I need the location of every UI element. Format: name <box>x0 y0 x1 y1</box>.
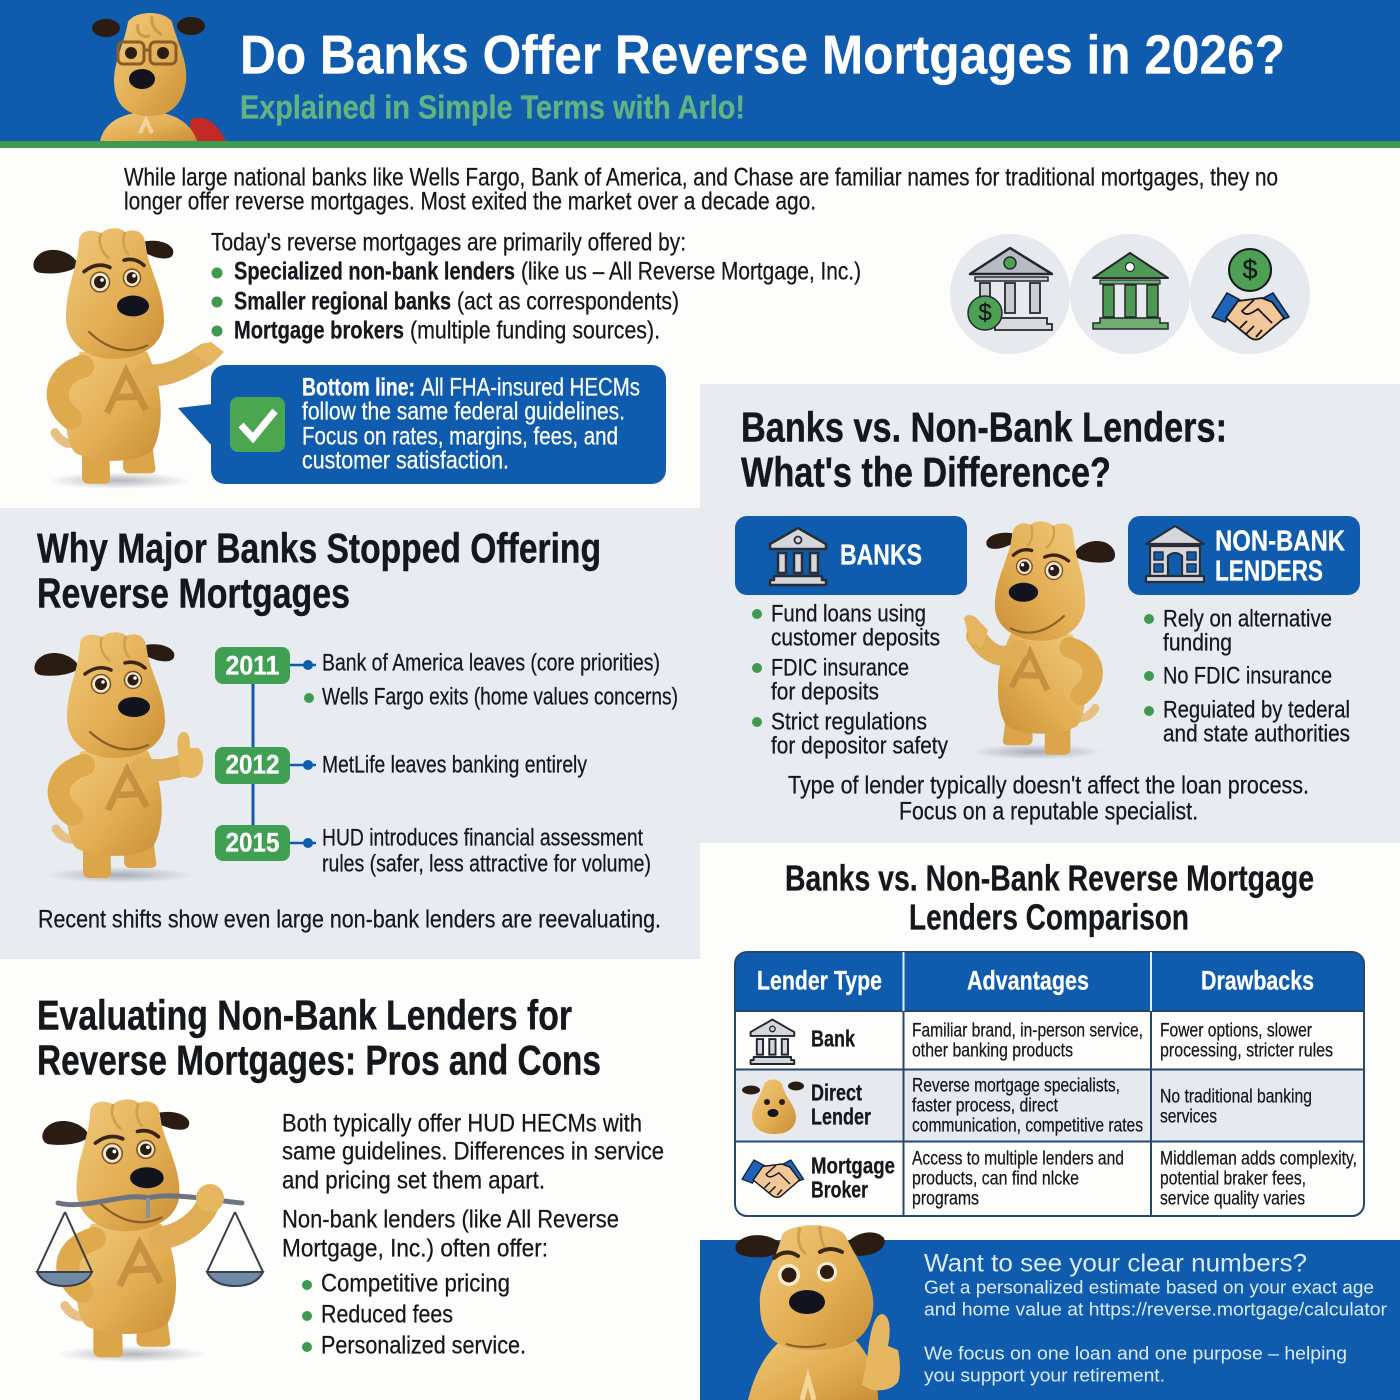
text: footer message: We focus on one loan and one purpose – helping <box>924 1342 1347 1364</box>
row: direct lender: Lender <box>811 1104 871 1130</box>
row: direct lender: No traditional banking <box>1160 1086 1312 1108</box>
list: non-bank traits <box>1144 606 1350 748</box>
icon: green bank <box>1093 253 1168 329</box>
row: bank: processing, stricter rules <box>1160 1040 1333 1062</box>
list: banks traits <box>752 600 948 760</box>
row: mortgage broker: programs <box>912 1188 979 1210</box>
icon: mascot head <box>742 1080 804 1134</box>
subtitle: Explained in Simple Terms with Arlo! <box>240 88 745 126</box>
timeline entry: 2011: 2011 <box>226 650 280 680</box>
row: direct lender: communication, competitive rates <box>912 1114 1143 1136</box>
callout: bottom line <box>178 365 666 484</box>
table header: Lender Type <box>757 966 882 996</box>
heading: why major banks stopped: Reverse Mortgages <box>37 570 350 616</box>
icon: header mascot with glasses <box>92 13 226 141</box>
row: mortgage broker <box>742 1148 1357 1210</box>
text: footer message: you support your retirement. <box>924 1364 1165 1386</box>
list: banks traits: Strict regulations <box>771 708 927 736</box>
list: who offers reverse mortgages <box>211 228 861 344</box>
table header: Advantages <box>967 966 1089 996</box>
callout: bottom line: customer satisfaction. <box>302 446 509 474</box>
card: non-bank lenders header: LENDERS <box>1215 556 1323 588</box>
list: who offers reverse mortgages: (act as correspondents) <box>457 288 679 316</box>
icon: lender building <box>1146 526 1204 582</box>
row: bank: Familiar brand, in-person service, <box>912 1020 1143 1042</box>
title: Do Banks Offer Reverse Mortgages in 2026? <box>240 24 1285 86</box>
timeline entry: 2012 <box>215 747 587 784</box>
list: banks traits: customer deposits <box>771 624 940 652</box>
timeline <box>215 647 678 878</box>
row: mortgage broker: Mortgage <box>811 1152 895 1178</box>
heading: evaluating non-bank lenders: Evaluating Non-Bank Lenders for <box>37 992 572 1038</box>
icon: mascot presenting <box>33 228 224 489</box>
list: who offers reverse mortgages: Smaller regional banks <box>234 288 451 316</box>
heading: evaluating non-bank lenders: Reverse Mortgages: Pros and Cons <box>37 1036 601 1084</box>
row: bank: other banking products <box>912 1040 1073 1062</box>
list: who offers reverse mortgages: Specialized non-bank lenders <box>234 258 515 286</box>
icon: green check <box>230 397 285 452</box>
intro paragraph <box>124 164 1278 216</box>
callout: bottom line: Bottom line: <box>302 374 415 402</box>
timeline entry: 2012: MetLife leaves banking entirely <box>322 752 587 778</box>
row: direct lender <box>742 1074 1312 1136</box>
callout: bottom line: follow the same federal guidelines. <box>302 398 625 426</box>
row: bank: Fower options, slower <box>1160 1020 1312 1042</box>
panel: difference background <box>700 384 1400 843</box>
list: banks traits: FDIC insurance <box>771 654 909 682</box>
timeline entry: 2015: HUD introduces financial assessment <box>322 824 643 852</box>
icon: balance scales <box>37 1196 263 1286</box>
note: type of lender <box>788 772 1309 826</box>
timeline entry: 2011: Wells Fargo exits (home values concerns) <box>322 684 678 710</box>
list: non-bank traits: Reguiated by tederal <box>1163 696 1350 724</box>
timeline entry: 2015: 2015 <box>226 828 280 858</box>
text block: evaluating non-bank lenders <box>282 1110 664 1360</box>
row: bank <box>751 1020 1333 1064</box>
row: direct lender: faster process, direct <box>912 1094 1058 1116</box>
note: type of lender: Focus on a reputable specialist. <box>899 798 1198 826</box>
list: who offers reverse mortgages: (like us – All Reverse Mortgage, Inc.) <box>521 258 861 286</box>
heading: banks vs non-bank difference: Banks vs. Non-Bank Lenders: <box>741 404 1227 450</box>
icon: coin over handshake <box>1212 249 1289 340</box>
list: non-bank traits: and state authorities <box>1163 720 1350 748</box>
icon: coin over handshake: $ <box>1242 254 1258 284</box>
row: bank: Bank <box>811 1026 855 1052</box>
timeline entry: 2011: Bank of America leaves (core priorities) <box>322 650 660 676</box>
text block: evaluating non-bank lenders: Competitive pricing <box>321 1270 510 1298</box>
icon: mascot thumbs up footer <box>735 1225 900 1400</box>
table header <box>757 966 1314 996</box>
list: non-bank traits: Rely on alternative <box>1163 606 1332 632</box>
heading: banks vs non-bank difference <box>741 404 1227 496</box>
icon: mascot pointing <box>964 521 1115 760</box>
note: type of lender: Type of lender typically doesn't affect the loan process. <box>788 772 1309 800</box>
list: non-bank traits: No FDIC insurance <box>1163 662 1332 690</box>
row: mortgage broker: service quality varies <box>1160 1188 1305 1210</box>
icons: bank and handshake circles <box>950 234 1310 354</box>
heading: why major banks stopped: Why Major Banks Stopped Offering <box>37 524 601 572</box>
icon: bank <box>770 528 826 585</box>
list: non-bank traits: funding <box>1163 630 1232 656</box>
text: footer message <box>924 1250 1387 1386</box>
footer call to action <box>700 1225 1400 1400</box>
text block: evaluating non-bank lenders: and pricing set them apart. <box>282 1166 545 1194</box>
card: non-bank lenders header <box>1128 516 1360 595</box>
list: banks traits: for depositor safety <box>771 732 948 760</box>
text: footer message: and home value at https://reverse.mortgage/calculator <box>924 1298 1387 1320</box>
callout: bottom line: Focus on rates, margins, fees, and <box>302 422 618 450</box>
text block: evaluating non-bank lenders: Both typically offer HUD HECMs with <box>282 1110 642 1138</box>
header banner <box>0 0 1400 148</box>
text block: evaluating non-bank lenders: same guidelines. Differences in service <box>282 1138 664 1166</box>
row: direct lender: Direct <box>811 1080 862 1106</box>
row: mortgage broker: products, can find nlcke <box>912 1168 1079 1190</box>
timeline entry: 2015: rules (safer, less attractive for volume) <box>322 850 651 878</box>
icon: gray bank with coin <box>968 248 1052 330</box>
heading: comparison: Lenders Comparison <box>909 896 1189 938</box>
text block: evaluating non-bank lenders: Non-bank lenders (like All Reverse <box>282 1206 619 1234</box>
list: banks traits: for deposits <box>771 678 879 706</box>
icon: gray bank with coin: $ <box>978 300 992 326</box>
text: footer message: Want to see your clear numbers? <box>924 1250 1307 1278</box>
panel: why banks stopped background <box>0 508 700 959</box>
intro paragraph: longer offer reverse mortgages. Most exited the market over a decade ago. <box>124 188 816 216</box>
row: mortgage broker: Broker <box>811 1176 868 1202</box>
text block: evaluating non-bank lenders: Personalized service. <box>321 1332 526 1360</box>
card: non-bank lenders header: NON-BANK <box>1215 526 1345 558</box>
timeline entry: 2011 <box>215 647 678 710</box>
card: banks header <box>735 516 967 595</box>
row: direct lender: services <box>1160 1106 1217 1128</box>
heading: evaluating non-bank lenders <box>37 992 601 1084</box>
row: mortgage broker: Middleman adds complexity, <box>1160 1148 1357 1170</box>
timeline entry: 2015 <box>215 824 651 878</box>
timeline entry: 2012: 2012 <box>226 750 280 780</box>
heading: comparison <box>785 858 1314 938</box>
note: recent shifts: Recent shifts show even large non-bank lenders are reevaluating. <box>38 906 661 934</box>
callout: bottom line: All FHA-insured HECMs <box>421 374 640 402</box>
text block: evaluating non-bank lenders: Mortgage, Inc.) often offer: <box>282 1234 548 1262</box>
icon: mascot holding scales <box>37 1099 263 1362</box>
table header: Drawbacks <box>1201 966 1314 996</box>
text: footer message: Get a personalized estimate based on your exact age <box>924 1276 1374 1298</box>
icon: mascot thumbs up <box>34 632 203 883</box>
list: banks traits: Fund loans using <box>771 600 926 628</box>
card: banks header: BANKS <box>840 540 922 572</box>
list: who offers reverse mortgages: (multiple funding sources). <box>410 316 660 344</box>
row: mortgage broker: potential braker fees, <box>1160 1168 1306 1190</box>
list: who offers reverse mortgages: Mortgage brokers <box>234 316 404 344</box>
comparison table <box>735 952 1364 1216</box>
heading: why major banks stopped <box>37 524 601 616</box>
text block: evaluating non-bank lenders: Reduced fees <box>321 1300 453 1328</box>
list: who offers reverse mortgages: Today's reverse mortgages are primarily offered by: <box>211 228 686 256</box>
row: mortgage broker: Access to multiple lenders and <box>912 1148 1124 1170</box>
row: direct lender: Reverse mortgage specialists, <box>912 1074 1120 1096</box>
heading: banks vs non-bank difference: What's the Difference? <box>741 448 1111 496</box>
